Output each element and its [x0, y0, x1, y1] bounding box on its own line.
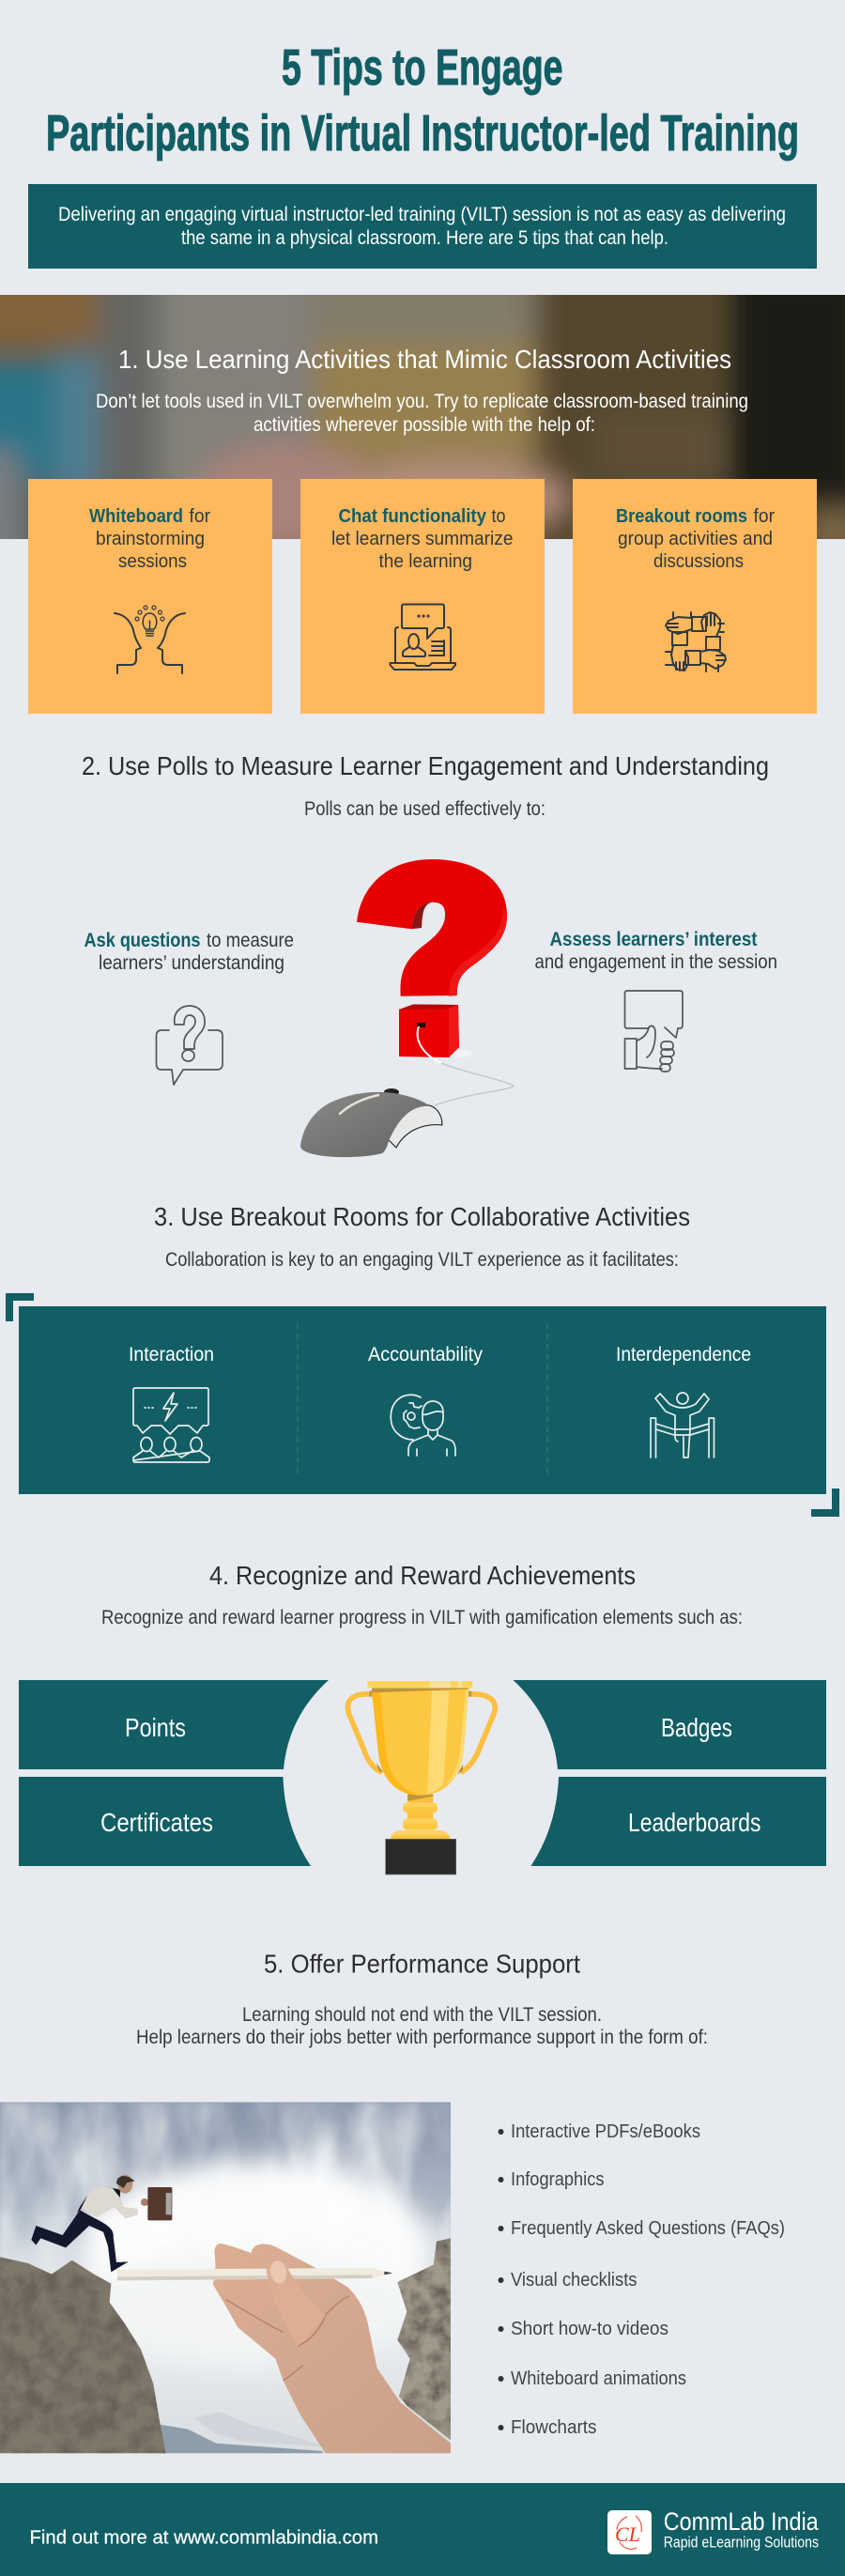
thumb over pencil	[266, 2260, 326, 2346]
section 4 heading: 4. Recognize and Reward Achievements	[209, 1561, 636, 1590]
right cliff	[397, 2238, 451, 2440]
section 1 intro text: Don’t let tools used in VILT overwhelm you. Try to replicate classroom-based training	[96, 391, 748, 412]
performance support list: Flowcharts	[511, 2417, 597, 2438]
right poll text: assess interest	[535, 929, 777, 973]
card: chat functionality: to	[492, 506, 505, 527]
card: whiteboard: Whiteboard	[89, 506, 183, 527]
bar: certificates	[19, 1777, 311, 1866]
red question mark	[357, 859, 507, 996]
section 2 intro text: Polls can be used effectively to:	[304, 798, 545, 820]
card: breakout rooms: for	[753, 506, 775, 527]
hand holding pencil	[213, 2244, 451, 2453]
title: 5 Tips to Engage	[282, 39, 563, 96]
icon: thumbs up speech bubble	[625, 991, 683, 1072]
bar: points	[19, 1680, 329, 1769]
logo: CommLab India: CommLab India	[664, 2507, 820, 2536]
card: whiteboard: sessions	[118, 551, 187, 572]
left cliff	[0, 2257, 166, 2453]
intro banner	[28, 184, 817, 269]
performance support list: Short how-to videos	[511, 2319, 668, 2339]
question mark inner shading	[411, 902, 432, 929]
question mark side highlight	[449, 906, 507, 996]
section 3 heading: 3. Use Breakout Rooms for Collaborative Activities	[154, 1202, 690, 1231]
section 5 intro text: Learning should not end with the VILT session.	[242, 2004, 602, 2026]
icon: accountability	[391, 1395, 455, 1456]
performance support list: Frequently Asked Questions (FAQs)	[511, 2218, 785, 2239]
performance support list: Whiteboard animations	[511, 2368, 686, 2389]
bar: certificates: Certificates	[100, 1808, 213, 1837]
left poll text: ask questions	[84, 930, 294, 974]
card: breakout rooms: discussions	[653, 551, 744, 572]
title	[46, 39, 799, 162]
section 1 blurred photo background	[0, 295, 845, 539]
panel: collaboration benefits	[6, 1293, 839, 1517]
pencil	[117, 2268, 392, 2280]
icon: question in speech bubble	[156, 1006, 223, 1085]
icon: two heads and light bulb	[115, 606, 185, 673]
section 4 intro text: Recognize and reward learner progress in VILT with gamification elements such as:	[101, 1607, 743, 1628]
card: whiteboard: for	[190, 506, 210, 527]
section 5 heading: 5. Offer Performance Support	[264, 1950, 580, 1978]
left poll text: ask questions: learners’ understanding	[99, 952, 284, 974]
leaping businessman	[31, 2175, 172, 2272]
performance support list: Infographics	[511, 2169, 605, 2190]
section 3 intro text: Collaboration is key to an engaging VILT experience as it facilitates:	[165, 1249, 679, 1271]
card: chat functionality: the learning	[379, 551, 472, 572]
trophy illustration	[347, 1681, 495, 1874]
card: whiteboard	[28, 479, 272, 714]
card: whiteboard: brainstorming	[96, 529, 205, 549]
icon: interaction	[133, 1388, 209, 1462]
bar: points: Points	[125, 1713, 186, 1742]
right poll text: assess interest: Assess learners’ interest	[550, 929, 757, 950]
logo: CommLab India: CL	[615, 2522, 640, 2546]
icon: interdependence finish line	[651, 1393, 714, 1458]
red cube dot	[399, 1005, 459, 1057]
icon: laptop with chat bubble	[391, 605, 455, 670]
section 1 heading: 1. Use Learning Activities that Mimic Classroom Activities	[118, 345, 731, 374]
right poll text: assess interest: and engagement in the session	[535, 951, 777, 973]
computer mouse	[384, 1088, 399, 1096]
card: breakout rooms: group activities and	[618, 529, 773, 549]
card: chat functionality: let learners summarize	[331, 529, 513, 549]
section 5 intro text	[136, 2004, 708, 2048]
card: breakout rooms: Breakout rooms	[616, 506, 747, 527]
left poll text: ask questions: to measure	[207, 930, 294, 951]
bar: leaderboards: Leaderboards	[628, 1808, 760, 1837]
left poll text: ask questions: Ask questions	[84, 930, 201, 951]
distant mountains	[160, 2425, 322, 2453]
bar: badges	[513, 1680, 826, 1769]
bar: leaderboards	[531, 1777, 826, 1866]
bar: badges: Badges	[661, 1713, 732, 1742]
icon: four interlocked hands	[666, 612, 726, 671]
intro banner: the same in a physical classroom. Here are 5 tips that can help.	[181, 227, 668, 249]
card: chat functionality: Chat functionality	[338, 506, 487, 527]
card: chat functionality	[300, 479, 545, 714]
section 1 intro text	[96, 391, 748, 436]
performance support list: Visual checklists	[511, 2270, 637, 2291]
photo: businessman leaping across a pencil bridge	[0, 2102, 451, 2453]
performance support list	[498, 2121, 785, 2438]
section 5 intro text: Help learners do their jobs better with performance support in the form of:	[136, 2027, 708, 2048]
mouse cable	[418, 1026, 514, 1105]
panel: collaboration benefits: Interaction	[129, 1344, 214, 1365]
footer link text: Find out more at www.commlabindia.com	[30, 2528, 378, 2549]
panel: collaboration benefits: Interdependence	[616, 1344, 751, 1365]
footer	[0, 2483, 845, 2576]
section 1 intro text: activities wherever possible with the help of:	[254, 414, 595, 436]
panel: collaboration benefits: Accountability	[368, 1344, 483, 1365]
card: breakout rooms	[573, 479, 817, 714]
logo: CommLab India	[607, 2507, 820, 2554]
performance support list: Interactive PDFs/eBooks	[511, 2121, 700, 2142]
cube shadow	[448, 1050, 472, 1057]
question mark and mouse illustration	[300, 859, 514, 1157]
section 2 heading: 2. Use Polls to Measure Learner Engagement and Understanding	[82, 751, 769, 780]
